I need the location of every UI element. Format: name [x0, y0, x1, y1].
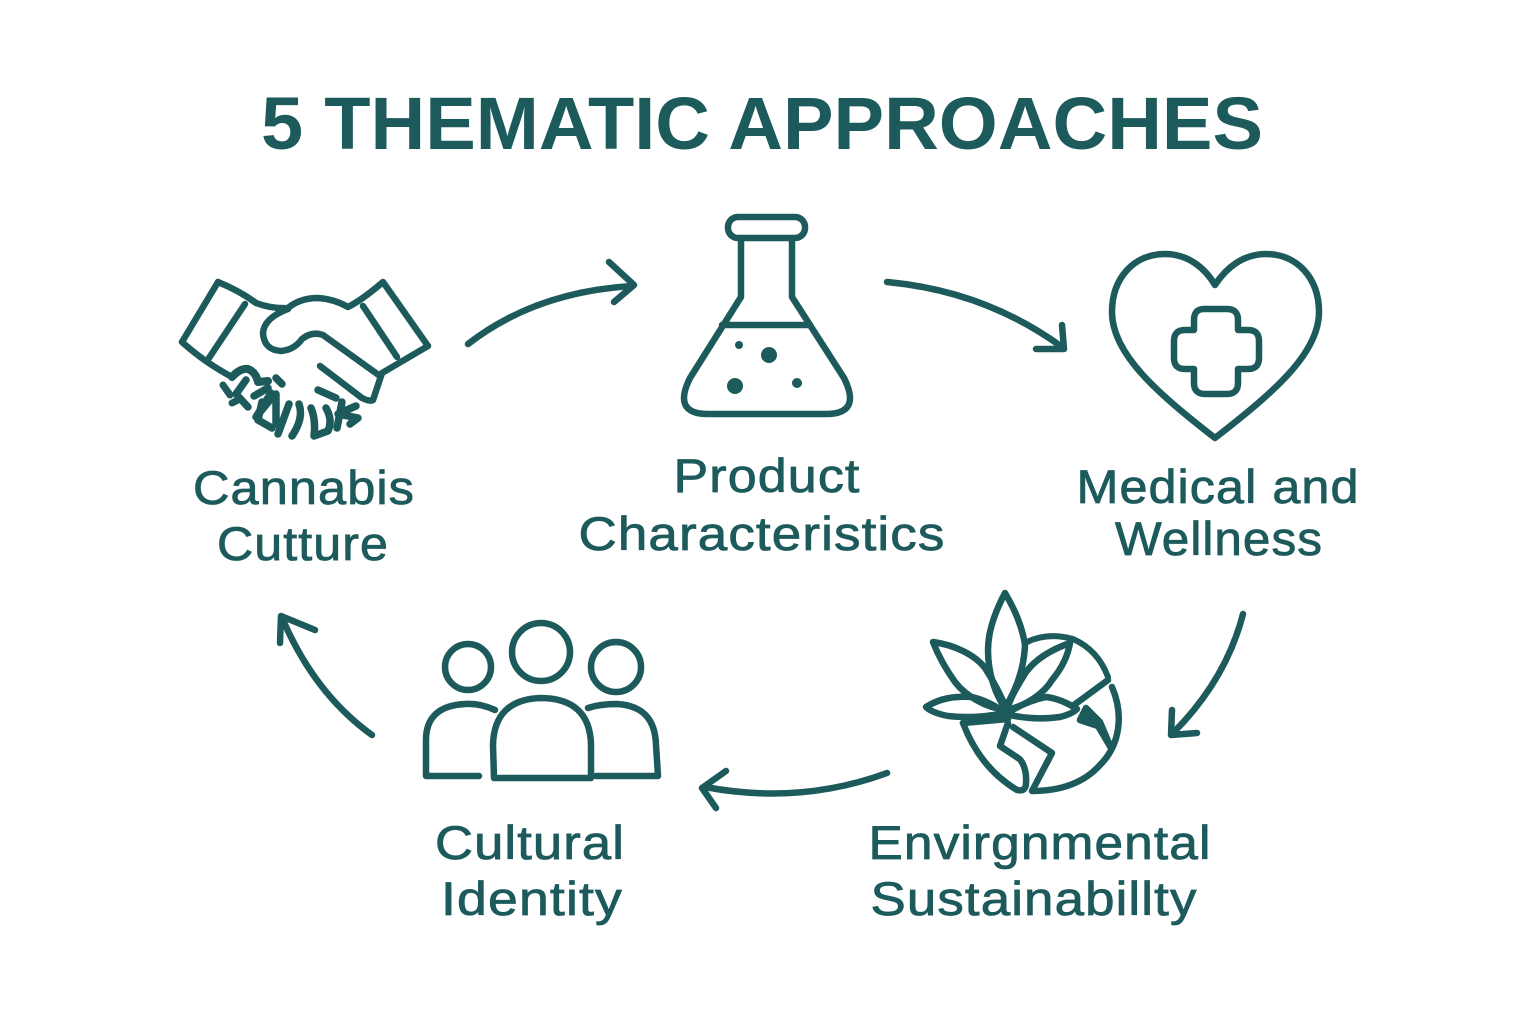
- icon: people: [426, 623, 658, 778]
- label: Cannabis Culture: Cannabis: [193, 461, 415, 514]
- arrow: cultural to culture: [280, 616, 372, 735]
- icon: handshake: [182, 282, 428, 436]
- label: Cultural Identity: Identity: [441, 872, 623, 925]
- person: right: [588, 642, 658, 776]
- label: Product Characteristics: [578, 449, 946, 560]
- label: Cultural Identity: Cultural: [435, 816, 625, 869]
- icon: heart with cross: [1112, 254, 1319, 438]
- label: Medical and Wellness: Medical and: [1076, 460, 1360, 513]
- title: 5 THEMATIC APPROACHES: [261, 82, 1263, 165]
- arrow: culture to product: [468, 262, 634, 344]
- label: Cannabis Culture: Cutture: [217, 517, 389, 570]
- label: Medical and Wellness: [1076, 460, 1360, 565]
- arrow: environmental to cultural: [702, 771, 887, 808]
- person: left: [426, 644, 495, 776]
- label: Product Characteristics: Product: [674, 449, 860, 502]
- label: Environmental Sustainability: Sustainabillty: [870, 872, 1198, 925]
- leaf hub: [999, 705, 1013, 719]
- label: Cultural Identity: [435, 816, 625, 925]
- icon: leaf and globe: [926, 593, 1119, 791]
- label: Cannabis Culture: [193, 461, 415, 570]
- land mass on globe: [1080, 708, 1111, 748]
- label: Medical and Wellness: Wellness: [1115, 512, 1323, 565]
- label: Environmental Sustainability: Envirgnmental: [868, 816, 1212, 869]
- icon: flask: [684, 217, 850, 414]
- flask bubbles: [727, 341, 802, 394]
- arrow: medical to environmental: [1171, 614, 1243, 735]
- label: Product Characteristics: Characteristics: [578, 507, 946, 560]
- label: Environmental Sustainability: [868, 816, 1212, 925]
- person: centre: [493, 623, 591, 778]
- arrow: product to medical: [887, 282, 1064, 349]
